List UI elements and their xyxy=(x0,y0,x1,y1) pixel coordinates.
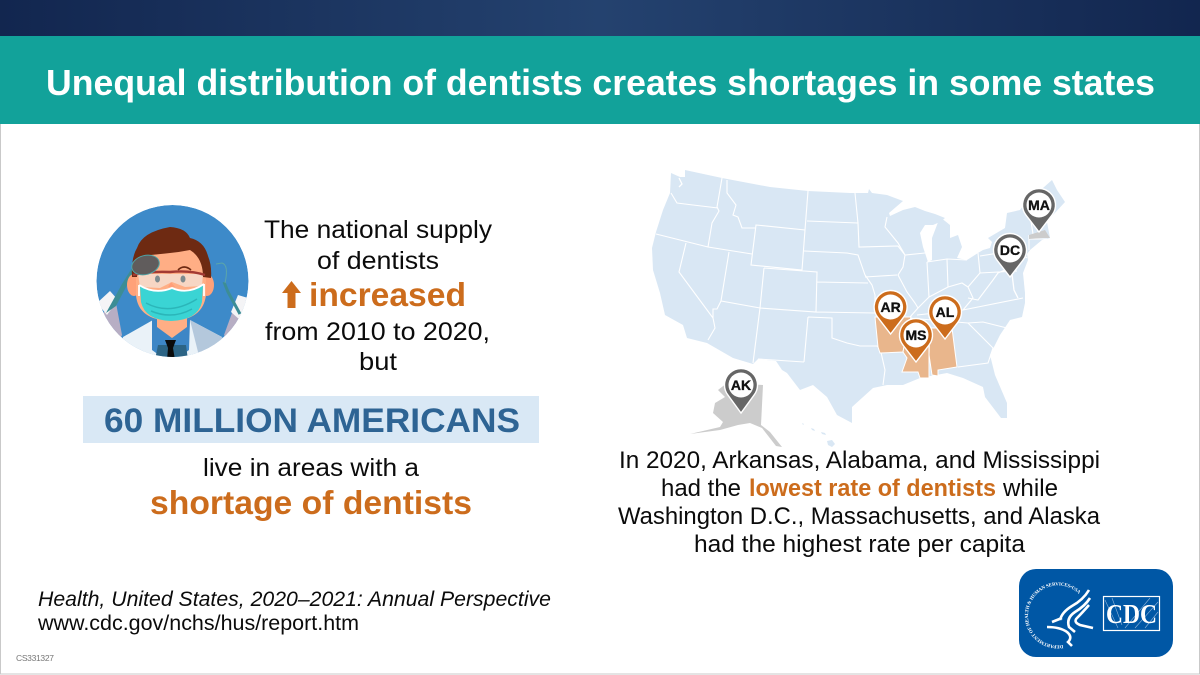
text: national supply increased: increased xyxy=(309,276,466,313)
icon: masked dentist avatar xyxy=(96,205,248,360)
right eyebrow xyxy=(178,267,191,270)
pin: AL xyxy=(928,295,962,339)
pin: MA xyxy=(1022,188,1056,232)
pin: AR: AR xyxy=(880,299,901,315)
pin: DC: DC xyxy=(1000,242,1020,258)
Hawaii xyxy=(802,423,835,447)
title banner xyxy=(0,36,1200,124)
source citation: Health, United States, 2020–2021: Annual Perspective xyxy=(38,588,551,611)
head xyxy=(127,274,136,296)
pin: MA: MA xyxy=(1028,197,1050,213)
pin: MS xyxy=(900,318,932,362)
hands and instruments xyxy=(104,305,122,337)
text: map description: In 2020, Arkansas, Alabama, and Mississippi xyxy=(619,447,1100,474)
nose xyxy=(168,282,175,287)
pin: AL: AL xyxy=(936,304,955,320)
text: map description: had the highest rate per capita xyxy=(694,531,1026,558)
text: map description: had the xyxy=(661,475,741,502)
top navy bar xyxy=(0,0,1200,36)
text: shortage of dentists: shortage of dentists xyxy=(150,484,472,521)
highlighted low-rate states: Arkansas, Mississippi, Alabama xyxy=(875,317,957,378)
source citation: www.cdc.gov/nchs/hus/report.htm xyxy=(37,612,359,635)
highlighted high-rate state: Massachusetts xyxy=(1029,230,1050,239)
text: map description: while xyxy=(1002,475,1058,502)
pin: DC xyxy=(994,233,1026,277)
logo: HHS and CDC xyxy=(1019,569,1173,657)
pin: AK: AK xyxy=(731,377,751,393)
goggles xyxy=(138,274,203,288)
title banner: Unequal distribution of dentists creates shortages in some states xyxy=(46,62,1155,103)
text: national supply increased: The national supply xyxy=(264,216,493,244)
text: map description: lowest rate of dentists xyxy=(749,475,996,502)
Puget Sound and Chesapeake Bay xyxy=(679,178,1018,298)
source citation xyxy=(37,588,551,635)
text: map description xyxy=(618,447,1101,558)
contiguous states xyxy=(652,170,1065,423)
CDC box: CDC xyxy=(1106,599,1157,629)
hair xyxy=(132,227,211,278)
icon: up arrow xyxy=(282,281,301,308)
dental mirror xyxy=(131,254,160,276)
HHS eagle xyxy=(1047,590,1093,646)
pin: AK xyxy=(724,368,758,413)
text: national supply increased: but xyxy=(359,348,397,376)
text: national supply increased xyxy=(264,216,493,376)
text: map description: Washington D.C., Massachusetts, and Alaska xyxy=(618,503,1101,530)
US map xyxy=(652,170,1065,447)
text: shortage of dentists: live in areas with a xyxy=(203,454,419,482)
dentist coat xyxy=(122,320,222,356)
text: national supply increased: from 2010 to 2020, xyxy=(265,318,490,346)
HHS seal text: DEPARTMENT OF HEALTH & HUMAN SERVICES•USA xyxy=(1024,582,1080,648)
pin: AR xyxy=(874,290,907,334)
text: national supply increased: of dentists xyxy=(317,247,439,275)
text: shortage of dentists xyxy=(150,454,472,521)
highlighted high-rate state: Alaska xyxy=(690,383,782,447)
mask xyxy=(140,285,203,321)
pin: MS: MS xyxy=(906,327,926,343)
state borders xyxy=(656,178,1047,385)
publication code: CS331327 xyxy=(16,653,54,663)
callout: 60 million Americans: 60 MILLION AMERICANS xyxy=(104,402,520,440)
